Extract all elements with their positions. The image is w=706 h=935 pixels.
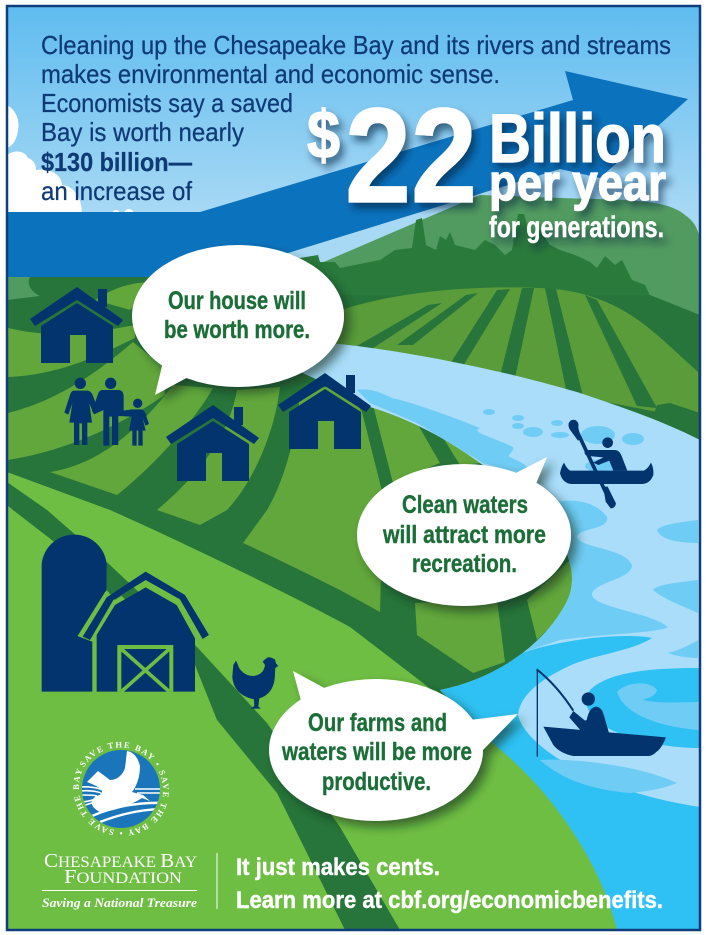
logo: save the bay: SAVE THE BAY • SAVE THE BAY • SAVE THE BAY • xyxy=(73,742,169,836)
kayaker xyxy=(560,420,653,508)
far fields xyxy=(320,287,700,445)
speech bubble: recreation xyxy=(357,457,571,606)
speech bubble: farms xyxy=(269,671,518,821)
speech bubble: recreation: recreation. xyxy=(412,550,517,578)
field base xyxy=(7,277,700,930)
fisherman xyxy=(537,669,666,757)
foundation wordmark: Saving a National Treasure xyxy=(42,895,197,910)
clouds xyxy=(7,105,134,219)
speech bubble: farms: waters will be more xyxy=(281,738,472,766)
foundation wordmark: FOUNDATION xyxy=(64,866,182,888)
speech bubble: recreation: will attract more xyxy=(382,521,546,549)
sky xyxy=(7,6,700,326)
footer call to action: It just makes cents. xyxy=(236,854,440,881)
intro text: an increase of xyxy=(41,176,193,206)
house 3 xyxy=(278,373,371,449)
speech bubble: house xyxy=(132,245,344,395)
field band xyxy=(7,482,400,930)
intro text: Economists say a saved xyxy=(41,88,293,118)
headline: $22 billion per year: Billion xyxy=(489,100,666,177)
city skyline xyxy=(296,214,652,300)
intro text: $130 billion— xyxy=(41,147,192,177)
speech bubble: house: be worth more. xyxy=(164,316,310,344)
family xyxy=(64,378,149,446)
speech bubble: farms: Our farms and xyxy=(308,709,447,737)
headline: $22 billion per year xyxy=(307,80,666,244)
intro text: makes environmental and economic sense. xyxy=(41,59,500,89)
foundation wordmark: CHESAPEAKE BAY xyxy=(44,850,197,872)
barn and silo xyxy=(42,535,209,692)
intro text: Bay is worth nearly xyxy=(41,117,244,147)
chicken xyxy=(232,657,278,709)
headline: $22 billion per year: per year xyxy=(489,154,666,211)
deep water xyxy=(440,636,699,929)
rising arrow xyxy=(7,71,688,277)
house 1 xyxy=(30,287,123,363)
foundation wordmark xyxy=(42,850,197,910)
foreground field xyxy=(7,472,617,930)
speech bubble: recreation: Clean waters xyxy=(402,491,528,519)
distant hill xyxy=(270,195,700,330)
logo: save the bay xyxy=(73,742,169,836)
headline: $22 billion per year: $ xyxy=(307,97,340,173)
headline: $22 billion per year: 22 xyxy=(345,80,477,231)
footer call to action xyxy=(236,854,663,914)
hill corner left xyxy=(7,277,40,300)
near field strips xyxy=(8,282,577,673)
house 2 xyxy=(166,405,259,481)
intro text xyxy=(41,30,671,206)
speech bubble: house: Our house will xyxy=(168,287,306,315)
water ripples xyxy=(357,389,698,660)
river xyxy=(290,335,705,935)
footer call to action: Learn more at cbf.org/economicbenefits. xyxy=(236,887,663,914)
speech bubble: farms: productive. xyxy=(322,768,431,796)
